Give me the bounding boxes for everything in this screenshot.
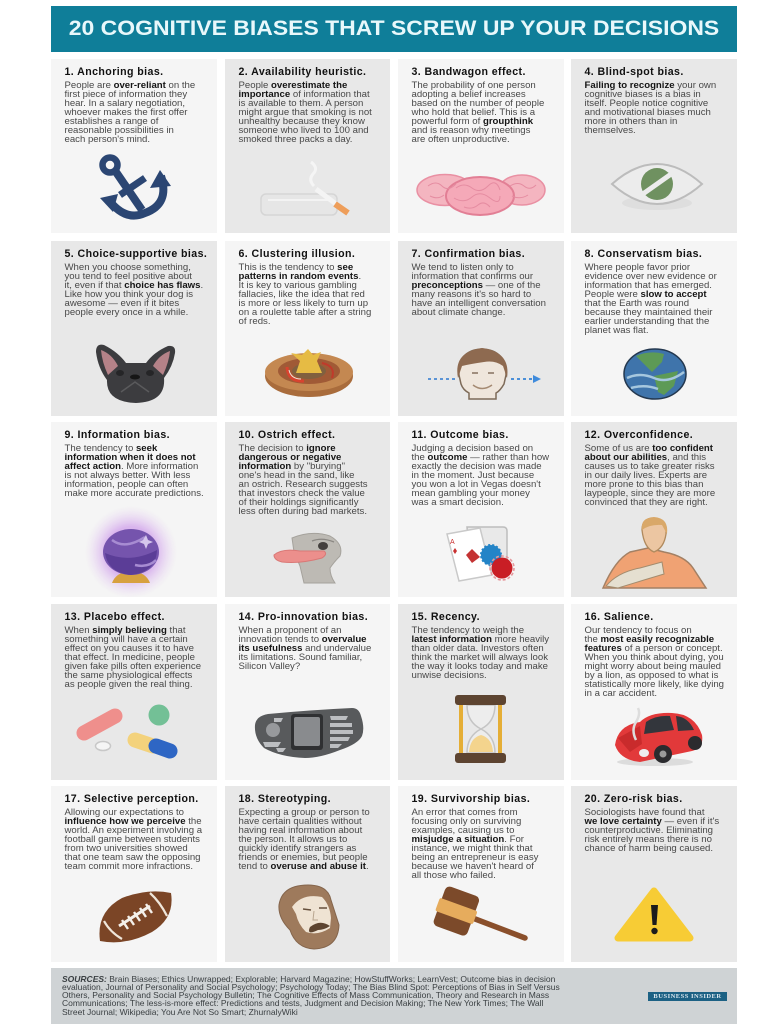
text: People overestimate the	[238, 80, 347, 90]
sources text: evaluation, Journal of Personality and Social Psychology; Psychology Today; The Bias Blind Spot: Perceptions of Bias in Self Versus	[62, 982, 560, 992]
text: powerful form of groupthink	[412, 116, 533, 127]
text: an ostrich. Research suggests	[238, 479, 368, 490]
sources text	[62, 975, 560, 1016]
text: reasonable possibilities in	[64, 125, 174, 136]
text: football game between students	[64, 834, 200, 845]
text: each person's mind.	[64, 134, 150, 145]
text: exactly the decision was made	[412, 461, 542, 472]
text: cognitive biases is a bias in	[584, 89, 701, 100]
icon: confident man	[602, 517, 708, 589]
icon: three brains	[416, 174, 546, 216]
text: evidence over new evidence or	[584, 271, 717, 282]
sources text: Communications; The less-is-more effect: Predictions and tests, Judgment and Decision Making; The New York Times; The Wall	[62, 998, 543, 1008]
text: one's head in the sand, like	[238, 470, 354, 481]
text: you won a lot in Vegas doesn't	[412, 479, 541, 490]
text: laypeople, since they are more	[584, 488, 715, 499]
text	[584, 262, 717, 336]
text: about our abilities, and this	[584, 452, 706, 463]
text: having real information about	[238, 825, 362, 836]
panel: information bias	[51, 422, 217, 597]
text: the most easily recognizable	[584, 634, 714, 645]
text	[412, 624, 549, 681]
text: The decision to ignore	[238, 442, 336, 454]
icon: crystal ball	[90, 510, 172, 594]
text: Our tendency to focus on	[584, 624, 692, 636]
heading: 15. Recency.	[412, 610, 480, 622]
text: Sociologists have found that	[584, 806, 705, 818]
text: the way it looks today and make	[412, 661, 548, 672]
text: affect action. More information	[64, 461, 198, 472]
text: is not always better. With less	[64, 470, 190, 481]
icon: warning triangle	[614, 888, 694, 942]
text: information that confirms our	[412, 271, 533, 282]
icon: pills	[76, 704, 178, 758]
text: was a smart decision.	[412, 497, 504, 508]
text: The tendency to weigh the	[412, 624, 524, 636]
heading: 1. Anchoring bias.	[64, 66, 164, 78]
text	[584, 806, 719, 854]
icon: anchor	[99, 154, 171, 220]
text: and motivational biases much	[584, 107, 711, 118]
text: latest information more heavily	[412, 634, 549, 645]
text: in our daily lives. Experts are	[584, 470, 707, 481]
sources footer	[51, 968, 737, 1024]
text: make more accurate predictions.	[64, 488, 204, 499]
text	[238, 806, 370, 872]
text: given fake pills often experience	[64, 661, 201, 672]
text: more prone to this bias than	[584, 479, 703, 490]
panel: blind-spot bias	[571, 59, 737, 233]
panel: survivorship bias	[398, 786, 564, 962]
text	[64, 80, 195, 145]
text: innovation tends to overvalue	[238, 634, 367, 645]
text: being an entrepreneur is easy	[412, 852, 538, 863]
text: When you choose something,	[64, 262, 191, 272]
icon: cards and chips: A	[450, 539, 455, 546]
icon: football	[99, 891, 172, 942]
text: in the moment. Just because	[412, 470, 534, 481]
text: on a roulette table after a string	[238, 307, 371, 318]
text: Some of us are too confident	[584, 442, 713, 454]
text	[412, 262, 546, 318]
sources text: Others, Personality and Social Psychology Bulletin; The Cognitive Effects of Mass Communication, Theory and Research in Mass	[62, 990, 549, 1000]
panel: placebo effect	[51, 604, 217, 780]
text: This is the tendency to see	[238, 262, 353, 272]
text: because we haven't heard of	[412, 861, 534, 872]
text: Where people favor prior	[584, 262, 690, 272]
panel: overconfidence	[571, 422, 737, 597]
text: friends or enemies, but people	[238, 852, 368, 863]
title text: 20 COGNITIVE BIASES THAT SCREW UP YOUR DECISIONS	[69, 17, 719, 40]
icon: ashtray with cigarette	[260, 161, 350, 216]
panel: availability heuristic	[225, 59, 390, 233]
heading: 2. Availability heuristic.	[238, 66, 366, 78]
sources text: Street Journal; Wikipedia; You Are Not So Smart; ZhurnalyWiki	[62, 1007, 298, 1017]
text: of their holdings significantly	[238, 497, 358, 508]
icon: eye with blind spot	[610, 163, 704, 210]
text: When you think about dying, you	[584, 652, 724, 663]
text: We tend to listen only to	[412, 262, 514, 272]
text	[584, 80, 716, 136]
text: instance, we might think that	[412, 843, 533, 854]
heading: 10. Ostrich effect.	[238, 428, 335, 440]
text: Failing to recognize your own	[584, 80, 716, 90]
text: risk entirely means there is no	[584, 834, 712, 845]
text: have certain qualities without	[238, 816, 362, 827]
text: by a lion, as opposed to what is	[584, 670, 718, 681]
text: preconceptions — one of the	[412, 280, 541, 291]
panel: anchoring bias	[51, 59, 217, 233]
text: whoever makes the first offer	[64, 107, 188, 118]
text: themselves.	[584, 125, 636, 136]
text: unwise decisions.	[412, 670, 487, 681]
text: the same physiological effects	[64, 670, 192, 681]
text: its limitations. Sound familiar,	[238, 652, 362, 663]
panel: ostrich effect	[225, 422, 390, 597]
text: about climate change.	[412, 307, 505, 318]
text	[412, 806, 538, 881]
heading: 4. Blind-spot bias.	[584, 66, 684, 78]
text	[64, 806, 202, 872]
panel: zero-risk bias	[571, 786, 737, 962]
text: is available to them. A person	[238, 98, 363, 109]
text: fallacies, like the idea that red	[238, 289, 365, 300]
text: Allowing our expectations to	[64, 806, 184, 818]
text: Like how you think your dog is	[64, 289, 193, 300]
text: all those who failed.	[412, 870, 496, 881]
text	[584, 624, 724, 699]
text: When a proponent of an	[238, 624, 341, 636]
panel: confirmation bias	[398, 241, 564, 416]
text: focusing only on surviving	[412, 816, 521, 827]
text: that effect. In medicine, people	[64, 652, 195, 663]
text: The tendency to seek	[64, 442, 157, 454]
text: Silicon Valley?	[238, 661, 300, 672]
heading: 8. Conservatism bias.	[584, 248, 702, 260]
heading: 12. Overconfidence.	[584, 428, 693, 440]
text: the outcome — rather than how	[412, 452, 549, 463]
text	[412, 442, 549, 508]
text: information that has emerged.	[584, 280, 712, 291]
text: smoked three packs a day.	[238, 134, 352, 145]
text: causes us to take greater risks	[584, 461, 715, 472]
heading: 7. Confirmation bias.	[412, 248, 525, 260]
panel: conservatism bias	[571, 241, 737, 416]
text: that investors check the value	[238, 488, 365, 499]
text: statistically more likely, like dying	[584, 679, 724, 690]
text: than older data. Investors often	[412, 643, 544, 654]
icon: cards and chips	[446, 526, 515, 582]
text	[64, 442, 204, 499]
text: first piece of information they	[64, 89, 187, 100]
text: based on the number of people	[412, 98, 544, 109]
text: in a car accident.	[584, 688, 657, 699]
panel: recency	[398, 604, 564, 780]
text: its usefulness and undervalue	[238, 643, 371, 654]
text: someone who lived to 100 and	[238, 125, 369, 136]
text: itself. People notice cognitive	[584, 98, 708, 109]
heading: 16. Salience.	[584, 610, 654, 622]
text: have an intelligent conversation	[412, 298, 546, 309]
text: hear. In a salary negotiation,	[64, 98, 185, 109]
text: An error that comes from	[412, 806, 518, 818]
text: we love certainty — even if it's	[584, 816, 719, 827]
icon: hourglass	[455, 695, 506, 763]
panel: salience	[571, 604, 737, 780]
text: information when it does not	[64, 452, 196, 463]
text: awesome — even if it bites	[64, 298, 179, 309]
panel: outcome bias	[398, 422, 564, 597]
icon: bearded man head	[278, 884, 340, 950]
text	[64, 624, 201, 690]
heading: 17. Selective perception.	[64, 792, 199, 804]
text: people every once in a while.	[64, 307, 188, 318]
text	[412, 80, 544, 145]
text: that one team saw the opposing	[64, 852, 201, 863]
heading: 9. Information bias.	[64, 428, 170, 440]
icon: earth	[623, 348, 687, 400]
text: because they maintained their	[584, 307, 712, 318]
text: examples, causing us to	[412, 825, 514, 836]
text: patterns in random events.	[238, 271, 361, 282]
text: convinced that they are right.	[584, 497, 708, 508]
text: as people given the real thing.	[64, 679, 193, 690]
panel: selective perception	[51, 786, 217, 962]
text: earlier understanding that the	[584, 316, 709, 327]
text	[584, 442, 715, 508]
heading: 13. Placebo effect.	[64, 610, 165, 622]
text: tend to overuse and abuse it.	[238, 861, 369, 872]
text: team commit more infractions.	[64, 861, 193, 872]
text: unhealthy because they know	[238, 116, 365, 127]
text: more in others than in	[584, 116, 677, 127]
text: features of a person or concept.	[584, 643, 723, 654]
text: adopting a belief increases	[412, 89, 526, 100]
text: world. An experiment involving a	[64, 825, 202, 836]
icon: gavel	[434, 886, 528, 941]
heading: 14. Pro-innovation bias.	[238, 610, 368, 622]
text: When simply believing that	[64, 624, 186, 636]
text: quickly identify strangers as	[238, 843, 356, 854]
heading: 18. Stereotyping.	[238, 792, 331, 804]
text: less often during bad markets.	[238, 506, 367, 517]
text: The probability of one person	[412, 80, 536, 90]
text: is more or less likely to turn up	[238, 298, 368, 309]
heading: 3. Bandwagon effect.	[412, 66, 526, 78]
panel: clustering illusion	[225, 241, 390, 416]
panel: bandwagon effect	[398, 59, 564, 233]
text	[238, 442, 368, 517]
icon: french bulldog	[96, 344, 176, 403]
text: misjudge a situation. For	[412, 834, 524, 845]
text: importance of information that	[238, 89, 370, 100]
icon: old phone	[254, 708, 364, 758]
text: People are over-reliant on the	[64, 80, 195, 90]
text	[238, 624, 371, 672]
title banner	[51, 6, 737, 52]
panel: stereotyping	[225, 786, 390, 962]
text: Judging a decision based on	[412, 442, 533, 454]
text: of reds.	[238, 316, 270, 327]
text: might argue that smoking is not	[238, 107, 372, 118]
text: from two universities showed	[64, 843, 188, 854]
text: influence how we perceive the	[64, 816, 202, 827]
text: and is reason why meetings	[412, 125, 530, 136]
text	[238, 80, 372, 145]
icon: face with arrow	[428, 348, 541, 400]
text: It is key to various gambling	[238, 280, 357, 291]
text: information, people can often	[64, 479, 188, 490]
heading: 20. Zero-risk bias.	[584, 792, 683, 804]
text: Expecting a group or person to	[238, 806, 370, 818]
text: it, even if that choice has flaws.	[64, 280, 203, 291]
text: think the market will always look	[412, 652, 548, 663]
sources text: SOURCES: Brain Biases; Ethics Unwrapped; Explorable; Harvard Magazine; HowStuffWorks; LearnVest; Outcome bias in decision	[62, 974, 555, 984]
text: are often unproductive.	[412, 134, 510, 145]
text: might worry about being mauled	[584, 661, 721, 672]
text: who hold that belief. This is a	[412, 107, 535, 118]
text: counterproductive. Eliminating	[584, 825, 713, 836]
text: many reasons it's so hard to	[412, 289, 531, 300]
icon: crashed red car	[615, 708, 702, 766]
panel: choice-supportive bias	[51, 241, 217, 416]
icon: ostrich head	[274, 532, 342, 584]
text: information by "burying"	[238, 461, 345, 472]
text: dangerous or negative	[238, 452, 341, 463]
text: you tend to feel positive about	[64, 271, 192, 282]
Business Insider logo: BUSINESS INSIDER	[653, 993, 722, 1000]
text: planet was flat.	[584, 325, 648, 336]
text: the person. It allows us to	[238, 834, 347, 845]
text: something will have a certain	[64, 634, 188, 645]
icon: roulette wheel	[265, 349, 353, 397]
text: establishes a range of	[64, 116, 158, 127]
text	[64, 262, 203, 318]
text: effect on you causes it to have	[64, 643, 194, 654]
text: mean gambling your money	[412, 488, 530, 499]
heading: 5. Choice-supportive bias.	[64, 248, 207, 260]
heading: 19. Survivorship bias.	[412, 792, 530, 804]
panel: pro-innovation bias	[225, 604, 390, 780]
text: chance of harm being caused.	[584, 843, 713, 854]
text	[238, 262, 371, 327]
heading: 11. Outcome bias.	[412, 428, 509, 440]
heading: 6. Clustering illusion.	[238, 248, 355, 260]
text: that the Earth was round	[584, 298, 689, 309]
text: People were slow to accept	[584, 289, 707, 300]
Business Insider logo	[648, 992, 727, 1001]
